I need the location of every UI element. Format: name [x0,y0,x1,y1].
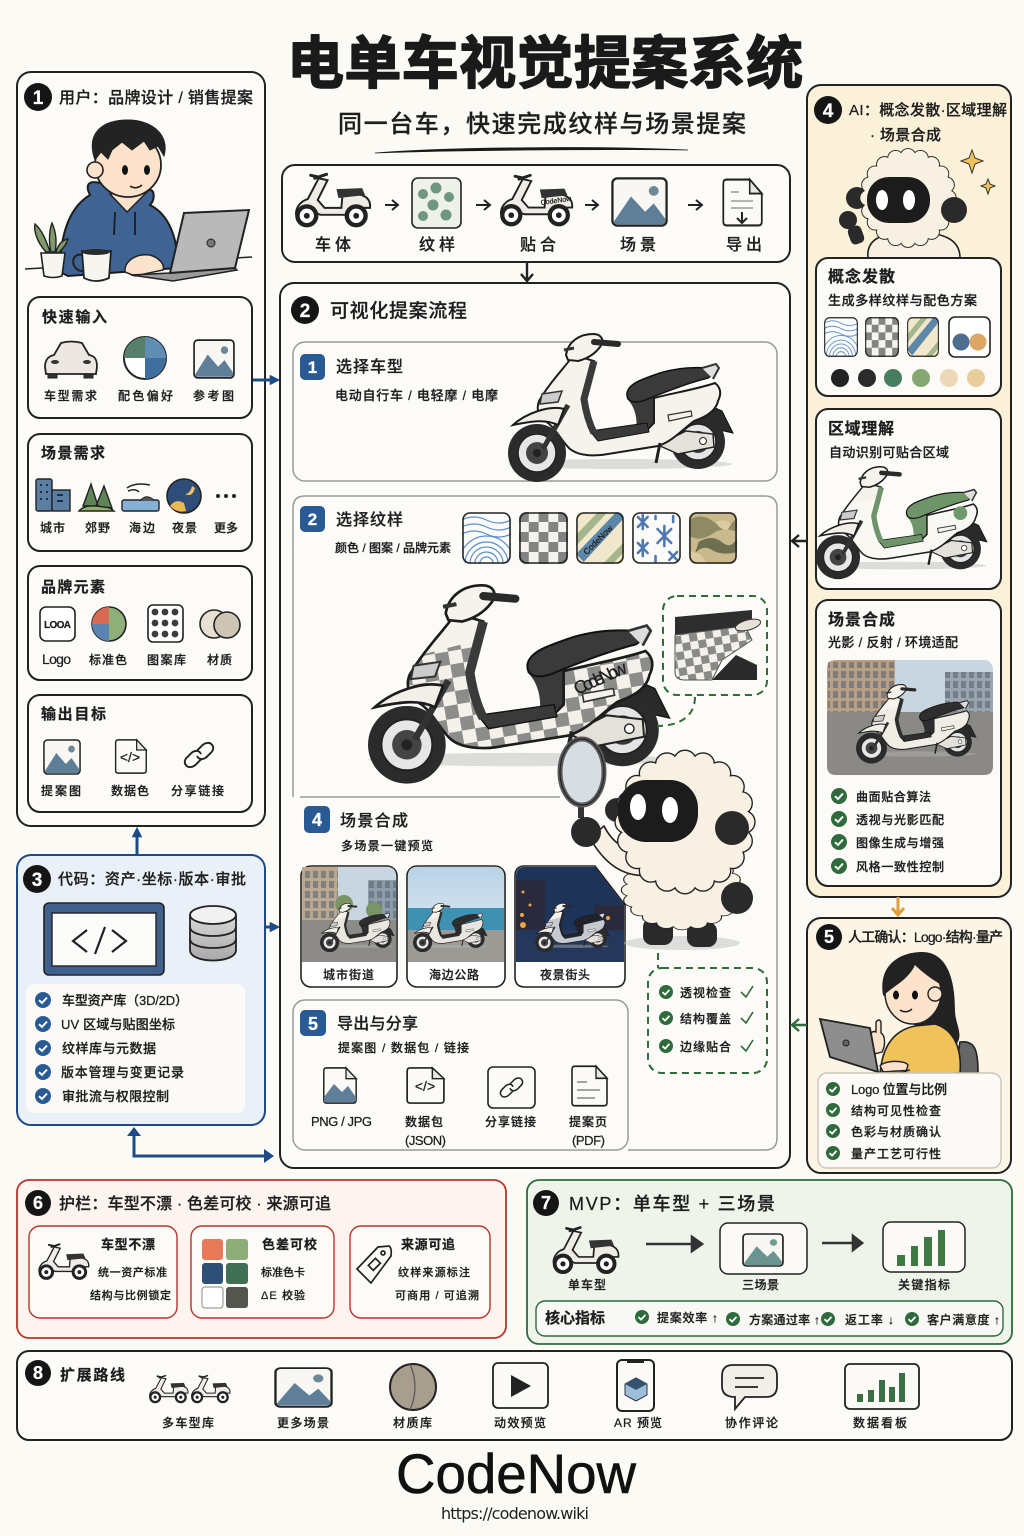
badge step 1: 1 [308,358,317,377]
icon: scooter library [150,1376,230,1402]
icon: code window [44,903,164,975]
panel 3: code [17,855,265,1125]
core metrics bar: 核心指标 [545,1309,605,1327]
inset: detail zoom [663,596,767,695]
icon: city [36,479,70,511]
icon: json: </> [415,1078,435,1094]
scene card: night street [515,866,625,987]
labels: 关键指标 [898,1277,950,1292]
heading: roadmap: 扩展路线 [60,1366,125,1384]
arrow: human to process [792,1019,807,1031]
card: confirmation list: 量产工艺可行性 [851,1147,941,1161]
heading: process: 可视化提案流程 [330,300,467,322]
labels: 郊野 [85,520,110,535]
card: traceable source [350,1226,490,1318]
core metrics bar: 返工率 ↓ [845,1312,894,1327]
badge 5 [816,924,842,950]
card: confirmation list: Logo 位置与比例 [851,1082,947,1097]
check list [831,788,847,874]
scooter: checker wrap [368,585,670,784]
card: model consistency: 统一资产标准 [98,1265,167,1279]
step 5: export and share: 导出与分享 [337,1015,418,1033]
heading: MVP: MVP：单车型 + 三场景 [569,1194,775,1214]
icon: more scenes [275,1368,332,1407]
labels: Logo [42,651,71,667]
step 2: select pattern: 颜色 / 图案 / 品牌元素 [335,540,451,555]
labels: 车型需求 [44,388,97,403]
labels: 更多场景 [277,1415,329,1430]
illustration: reviewer [820,952,978,1076]
card: concept divergence: 概念发散 [828,267,895,286]
labels: 车体 [315,236,351,254]
labels: 数据看板 [853,1415,907,1430]
card: model consistency [29,1226,177,1318]
swatch: camouflage [687,512,737,567]
badge 7: 7 [541,1193,551,1213]
magnifier [560,739,604,818]
step 1: select model [293,334,777,482]
badge 6: 6 [33,1193,43,1213]
arrow [385,200,398,210]
card: color checks: 标准色卡 [261,1265,305,1279]
icon: motion preview [493,1363,548,1408]
scooter: white [508,334,733,482]
labels [42,651,232,667]
badge 1 [24,83,52,111]
step 1: select model: 电动自行车 / 电轻摩 / 电摩 [335,388,498,403]
panel 2: visual process [280,283,790,1168]
panel 4: AI [807,85,1011,897]
scene card: city street: 城市街道 [323,967,374,982]
panel 5: human confirm [807,918,1011,1173]
panel 6: guardrails [17,1180,506,1338]
labels: 海边 [129,521,155,535]
card: color checks [191,1226,334,1318]
card: region understanding: 区域理解 [828,420,894,438]
arrow: flow to process [521,262,533,281]
card: confirmation list: 色彩与材质确认 [851,1124,941,1139]
icon: car [45,342,97,378]
card: traceable source: 来源可追 [401,1237,455,1252]
scooter: green region [816,467,987,579]
icon: seaside [122,484,159,511]
badge step 4: 4 [312,810,322,830]
scene card: seaside road [407,866,505,987]
icon: AR preview phone [617,1360,654,1411]
labels: 动效预览 [494,1415,546,1430]
icon: standard colors [92,607,126,641]
heading: human: 人工确认：Logo·结构·量产 [848,929,1003,945]
checks callout: 透视检查 [680,985,731,1000]
scene card: night street: 夜景街头 [540,967,590,982]
card: scene synthesis: 光影 / 反射 / 环境适配 [828,635,958,650]
labels: 提案页 [569,1114,607,1129]
list text: 审批流与权限控制 [62,1089,169,1104]
labels: AR 预览 [614,1415,662,1430]
arrow: flow back to code [127,1127,274,1163]
panel 7: MVP [527,1180,1012,1344]
sparkles [961,150,995,194]
icon: more [216,494,236,498]
icon: png [324,1068,356,1103]
icon: hills [79,484,114,511]
icon: scooter body [296,174,370,225]
badge 6 [25,1190,51,1216]
list text: 图像生成与增强 [856,835,944,850]
labels [44,388,234,403]
core metrics bar: 客户满意度 ↑ [927,1312,1000,1327]
card: color checks: 色差可校 [262,1237,317,1252]
icon: export document [723,180,762,225]
arrow: code up to user [136,831,138,855]
checks callout: 结构覆盖 [680,1011,731,1026]
core metrics bar [536,1301,1003,1336]
badge step 2 [300,506,325,532]
palette tile [949,317,990,357]
labels: 三场景 [742,1278,779,1292]
badge step 2: 2 [308,510,317,529]
panel 8: roadmap [17,1351,1012,1440]
arrow: code to flow [265,926,276,928]
arrow [688,200,702,210]
arrow: AI to process [792,535,807,547]
labels: 场景 [620,236,656,254]
icon: material sphere [390,1364,436,1410]
scene card: seaside road: 海边公路 [429,967,479,982]
arrow [476,200,490,210]
swatch: flowers [632,512,681,564]
labels: 图案库 [147,652,186,667]
labels: 纹样 [419,236,455,254]
labels: 数据色 [111,783,149,798]
core metrics bar: 方案通过率 ↑ [749,1312,820,1327]
scene photo [827,660,993,775]
panel: top flow [282,165,790,262]
badge 3 [23,865,51,893]
icon: materials [200,610,240,638]
card: traceable source: 可商用 / 可追溯 [395,1288,479,1302]
labels: (JSON) [405,1133,446,1148]
panel 1: user [17,72,265,826]
card: confirmation list: 结构可见性检查 [851,1103,941,1118]
step 4: scene compose [301,806,625,987]
step 5: export and share [293,1000,628,1150]
icon: color pie [124,337,166,379]
card: key metrics chart [883,1222,965,1272]
labels: 提案图 [41,783,81,798]
heading: AI: AI：概念发散·区域理解 [849,101,1007,119]
step 2: select pattern [293,496,777,1150]
labels: 标准色 [89,652,127,667]
icon: database [190,906,236,960]
card: output targets [28,695,252,812]
badge step 5 [300,1010,326,1036]
labels: 单车型 [568,1277,606,1292]
labels: PNG / JPG [311,1114,372,1129]
labels [568,1277,950,1292]
mascot with magnifier [560,739,754,950]
icon: scooter applied [501,175,573,224]
badge 8 [25,1360,51,1386]
checks callout [648,968,767,1073]
badge 4: 4 [823,101,834,122]
icon: night [167,479,201,513]
list text: 风格一致性控制 [856,859,944,874]
labels: 分享链接 [485,1114,536,1129]
step 5: export and share: 提案图 / 数据包 / 链接 [338,1040,469,1055]
labels: 材质 [207,653,232,667]
arrow [646,1237,702,1251]
heading: guardrails: 护栏：车型不漂 · 色差可校 · 来源可追 [59,1194,331,1213]
badge 7 [533,1190,559,1216]
labels: 夜景 [172,520,197,535]
step 2: select pattern: 选择纹样 [336,511,403,529]
labels: 数据包 [405,1114,443,1129]
badge 2: 2 [300,301,310,322]
url: https://codenow.wiki [441,1504,589,1523]
labels [41,783,224,798]
list text: UV 区域与贴图坐标 [61,1017,175,1032]
list text: 透视与光影匹配 [856,812,944,827]
labels: (PDF) [572,1133,605,1148]
mascot small [839,149,967,258]
icon: pdf [572,1066,607,1106]
check list [35,992,51,1104]
card: quick input: 快速输入 [42,308,107,326]
icon: scene [612,178,667,226]
icon: reference image [194,340,234,378]
connector: inset to scooter [657,697,695,726]
color swatches [202,1239,248,1308]
labels: 导出 [726,236,762,254]
step 1: select model: 选择车型 [336,358,403,376]
arrow: AI to human [892,897,904,915]
card: confirmation list [818,1073,1001,1168]
icon: logo [40,607,75,641]
arrow [585,200,598,210]
labels [315,236,762,254]
list text [61,993,188,1104]
icon: comment bubble [722,1365,777,1409]
labels: 参考图 [193,388,234,403]
badge 8: 8 [33,1363,43,1383]
heading: AI: · 场景合成 [870,127,941,144]
labels: 分享链接 [171,783,224,798]
color dots [831,369,985,387]
icon: data dashboard [845,1364,919,1409]
icon: logo: LOOA [44,620,71,631]
core metrics bar: 提案效率 ↑ [657,1310,718,1325]
card: three scenes [720,1223,807,1274]
icon: link [185,743,213,767]
swatch: stripes [571,505,634,572]
card: quick input [28,297,252,418]
labels: 更多 [214,520,238,535]
arrow [822,1236,862,1250]
logo: CodeNow: CodeNow [396,1442,637,1505]
list text: 纹样库与元数据 [62,1041,156,1056]
badge 5: 5 [824,927,834,947]
subtitle underline [375,148,688,153]
labels: 协作评论 [725,1415,778,1430]
icon: proposal image [44,740,80,774]
card: color checks: ΔE 校验 [261,1288,305,1302]
heading: user: 用户：品牌设计 / 销售提案 [59,88,253,107]
list text [856,789,944,874]
card: concept divergence [816,258,1001,396]
icon: json [407,1068,444,1103]
list text: 车型资产库（3D/2D） [62,993,188,1008]
icon: single scooter [553,1227,619,1272]
card: scene synthesis [816,600,1001,886]
badge 1: 1 [33,88,44,109]
badge 3: 3 [32,870,42,891]
labels [311,1114,607,1148]
title: 电单车视觉提案系统 [287,32,803,96]
labels [40,520,238,535]
step 4: scene compose: 多场景一键预览 [341,838,433,853]
badge step 1 [300,354,325,380]
scooter wrap label: CodeNow [570,657,631,699]
icon: pattern library [148,605,183,642]
icon: scooter applied: CodeNow [540,196,573,207]
checks callout: 边缘贴合 [680,1039,731,1054]
labels: 配色偏好 [118,388,173,403]
swatch: checker [519,512,568,564]
arrow: input to flow [253,378,276,382]
badge 4 [814,96,842,124]
card: brand elements: 品牌元素 [41,579,105,596]
illustration: designer with laptop [25,120,252,281]
swatch: waves [459,512,514,564]
card: region understanding: 自动识别可贴合区域 [829,445,949,460]
list text: 版本管理与变更记录 [61,1065,184,1080]
heading: code: 代码：资产·坐标·版本·审批 [58,870,246,888]
card: code asset list [26,984,245,1113]
icon: tag [357,1246,391,1283]
labels: 贴合 [520,236,556,254]
card: scene synthesis: 场景合成 [828,610,895,629]
card: traceable source: 纹样来源标注 [398,1265,470,1279]
scene card: city street [301,866,397,987]
card: output targets: 输出目标 [41,705,106,723]
badge step 4 [304,806,330,833]
card: scene needs: 场景需求 [41,444,105,462]
badge step 5: 5 [308,1014,318,1034]
labels [162,1415,907,1430]
step 4: scene compose: 场景合成 [340,812,408,830]
swatch: stripes: CodeNow [581,523,615,557]
labels: 材质库 [393,1415,432,1430]
heading: AI [849,101,1007,144]
subtitle: 同一台车，快速完成纹样与场景提案 [338,111,746,138]
icon: data package [116,740,146,773]
badge 2 [291,296,319,324]
card: concept divergence: 生成多样纹样与配色方案 [828,293,977,308]
card: model consistency: 车型不漂 [101,1237,155,1252]
card: scene needs [28,434,252,551]
icon: share link [488,1067,535,1108]
card: region understanding [816,409,1001,589]
list text: 曲面贴合算法 [856,789,931,804]
card: model consistency: 结构与比例锁定 [90,1288,171,1302]
labels: 城市 [40,520,65,535]
card: brand elements [28,566,252,680]
labels: 多车型库 [162,1415,214,1430]
connector: mascot to checks [657,953,659,968]
icon: data package: </> [120,749,140,765]
icon: pattern tile [412,178,461,228]
